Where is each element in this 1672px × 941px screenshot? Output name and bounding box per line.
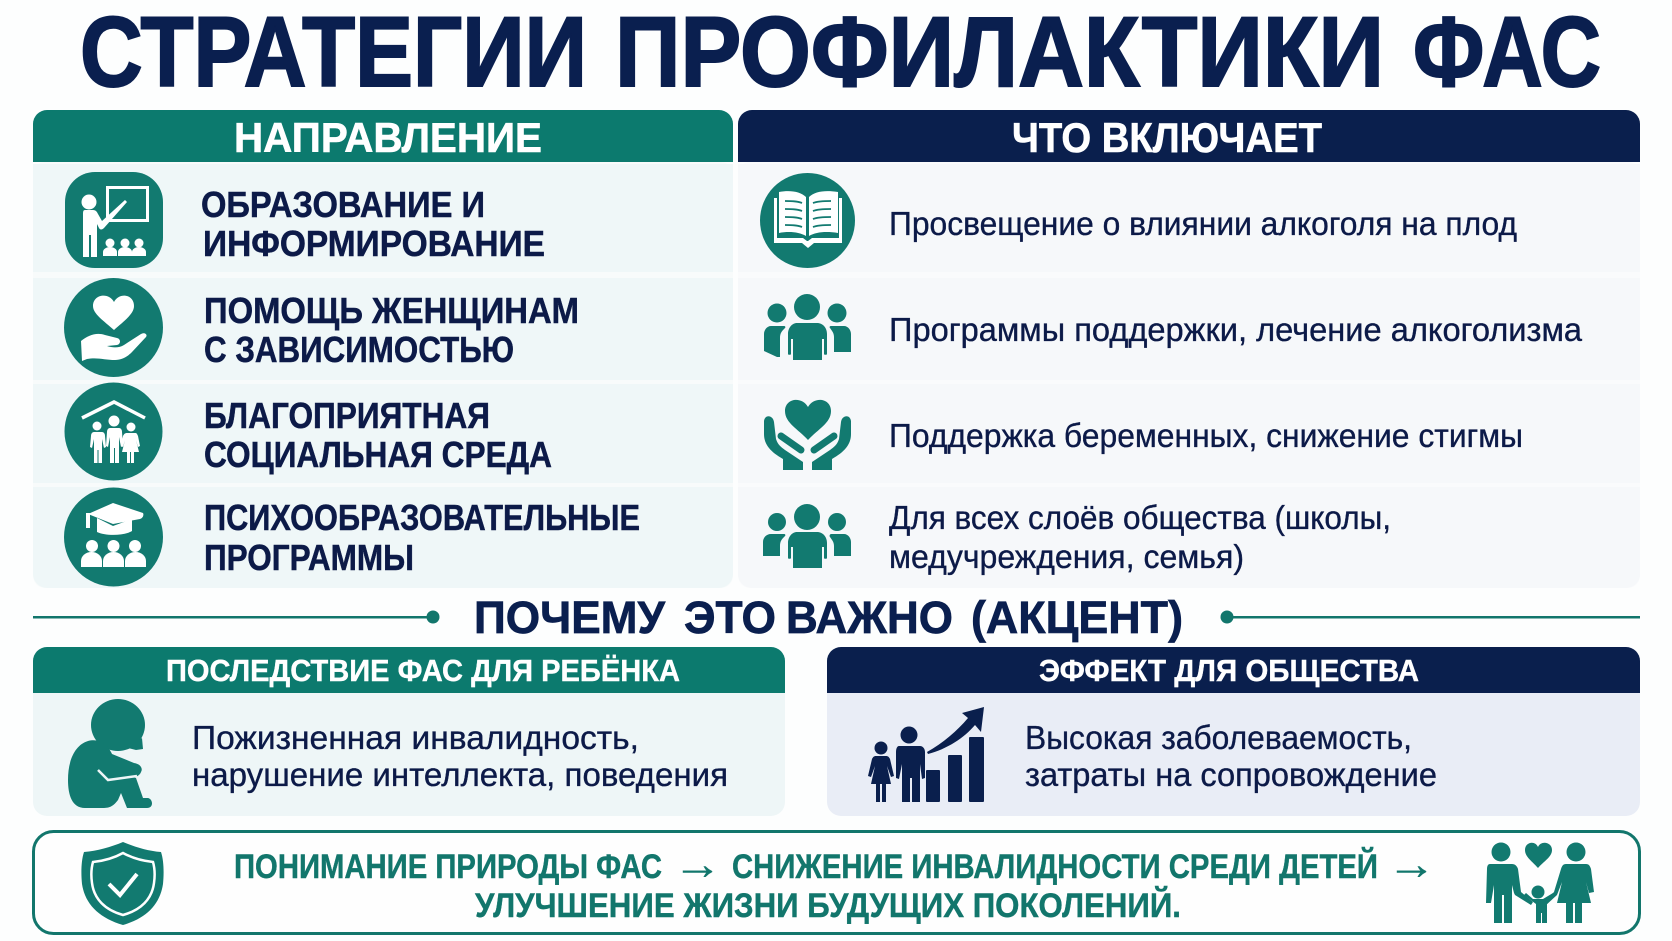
text: pregnant support: Поддержка беременных, снижение стигмы — [889, 417, 1523, 454]
text: conclusion: УЛУЧШЕНИЕ ЖИЗНИ БУДУЩИХ ПОКОЛЕНИЙ. — [475, 886, 1181, 925]
row: awareness — [738, 164, 1640, 272]
panel: effect for society — [827, 647, 1640, 816]
text: conclusion: → — [673, 840, 722, 889]
icon: graduation cap and group — [64, 488, 163, 586]
society panel header: ЭФФЕКТ ДЛЯ ОБЩЕСТВА — [1039, 653, 1419, 688]
panel: what it includes column — [738, 110, 1640, 588]
icon: people group — [763, 504, 851, 568]
label: psychoeducation: ПРОГРАММЫ — [204, 537, 414, 578]
label: help for women — [204, 290, 579, 370]
label: help for women: С ЗАВИСИМОСТЬЮ — [204, 329, 514, 370]
text: conclusion — [234, 840, 1436, 925]
row: support programs — [738, 278, 1640, 380]
child panel header: ПОСЛЕДСТВИЕ ФАС ДЛЯ РЕБЁНКА — [166, 653, 680, 688]
text: child consequences — [192, 719, 728, 793]
text: child consequences: нарушение интеллекта, поведения — [192, 756, 728, 793]
row: pregnant support — [738, 384, 1640, 483]
icon: people group — [764, 294, 851, 360]
section heading with side rules: ВАЖНО — [786, 592, 953, 643]
icon: family under roof — [64, 382, 162, 480]
text: all of society — [889, 499, 1391, 575]
text: support programs: Программы поддержки, лечение алкоголизма — [889, 311, 1583, 348]
text: conclusion: → — [1387, 840, 1436, 889]
row: all of society — [738, 487, 1640, 588]
callout: conclusion — [34, 832, 1640, 934]
label: education — [201, 184, 545, 264]
row: social environment — [33, 382, 733, 483]
label: social environment: БЛАГОПРИЯТНАЯ — [204, 395, 490, 436]
text: child consequences: Пожизненная инвалидность, — [192, 719, 639, 756]
icon: teacher — [65, 172, 163, 268]
includes header: ЧТО ВКЛЮЧАЕТ — [1012, 114, 1322, 161]
row: psychoeducation — [33, 487, 733, 588]
icon: open book — [760, 173, 855, 268]
row: education — [33, 164, 733, 272]
label: social environment: СОЦИАЛЬНАЯ СРЕДА — [204, 434, 552, 475]
panel: direction column — [33, 110, 733, 588]
icon: shield with check — [81, 842, 164, 925]
label: education: ИНФОРМИРОВАНИЕ — [203, 223, 545, 264]
section heading with side rules: (АКЦЕНТ) — [971, 592, 1183, 643]
society panel header — [827, 647, 1640, 693]
child panel header — [33, 647, 785, 693]
section heading with side rules: ЭТО — [684, 592, 776, 643]
row: help for women — [33, 278, 733, 380]
title — [80, 0, 1601, 107]
label: psychoeducation — [204, 497, 640, 578]
icon: sitting child — [68, 699, 152, 808]
label: help for women: ПОМОЩЬ ЖЕНЩИНАМ — [204, 290, 579, 331]
section heading with side rules: ПОЧЕМУ — [474, 592, 666, 643]
direction header: НАПРАВЛЕНИЕ — [234, 114, 542, 161]
text: society effect: Высокая заболеваемость, — [1025, 719, 1412, 756]
icon: people and rising bars — [868, 707, 984, 802]
text: society effect: затраты на сопровождение — [1025, 756, 1437, 793]
panel: consequences for child — [33, 647, 785, 816]
icon: family with heart — [1486, 842, 1594, 923]
icon: heart held by hands — [764, 400, 851, 470]
section heading with side rules — [33, 592, 1640, 643]
includes header — [738, 110, 1640, 162]
text: all of society: Для всех слоёв общества (школы, — [889, 499, 1391, 536]
icon: heart in hand — [64, 278, 163, 377]
label: psychoeducation: ПСИХООБРАЗОВАТЕЛЬНЫЕ — [204, 497, 640, 538]
label: social environment — [204, 395, 552, 475]
text: society effect — [1025, 719, 1437, 793]
direction header — [33, 110, 733, 162]
text: awareness: Просвещение о влиянии алкоголя на плод — [889, 205, 1517, 242]
label: education: ОБРАЗОВАНИЕ И — [201, 184, 485, 225]
text: all of society: медучреждения, семья) — [889, 538, 1244, 575]
text: conclusion: ПОНИМАНИЕ ПРИРОДЫ ФАС — [234, 848, 662, 886]
text: conclusion: СНИЖЕНИЕ ИНВАЛИДНОСТИ СРЕДИ ДЕТЕЙ — [732, 847, 1378, 886]
